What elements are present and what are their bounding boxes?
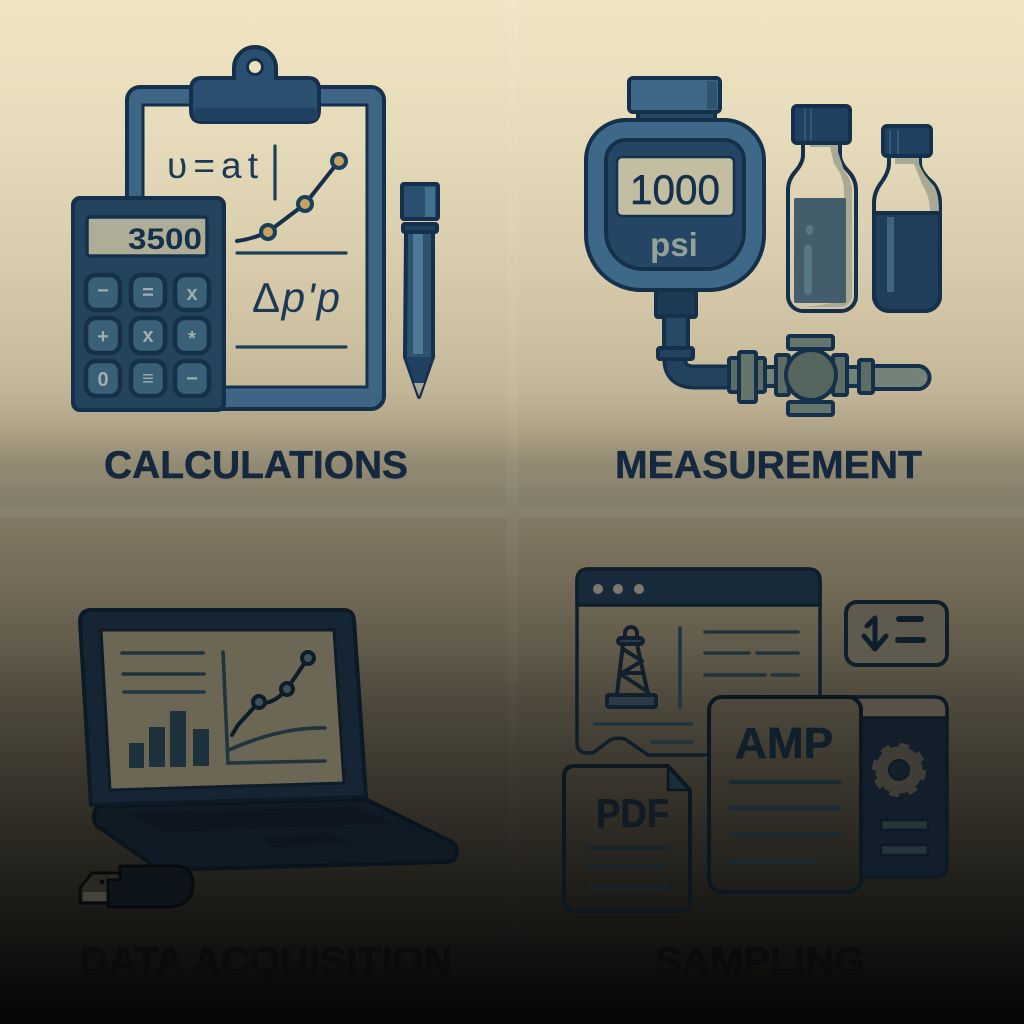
laptop lid	[80, 610, 366, 805]
icon: calculator: −	[97, 280, 109, 302]
heading: sampling: SAMPLING	[655, 940, 865, 983]
icon: sort badge	[846, 602, 947, 665]
icon: calculator: +	[97, 326, 109, 348]
panel: data acquisition	[80, 610, 457, 983]
laptop screen	[101, 630, 344, 790]
icon: calculator: x	[186, 283, 198, 305]
icon: browser window	[577, 569, 820, 755]
gauge reading: 1000	[630, 166, 720, 213]
icon: pipe and valve	[658, 336, 930, 415]
icon: sample bottle right	[874, 126, 940, 311]
pdf label: PDF	[596, 792, 669, 836]
heading: calculations: CALCULATIONS	[104, 444, 408, 487]
line chart	[223, 652, 325, 763]
icon: calculator: =	[142, 282, 154, 304]
formula: velocity: υ=at	[167, 145, 259, 186]
panel: calculations	[73, 47, 438, 487]
icon: calculator: x	[142, 325, 154, 347]
icon: amp document	[709, 697, 861, 892]
panel: measurement	[586, 78, 940, 487]
laptop base	[94, 799, 457, 870]
icon: pdf document	[564, 766, 690, 911]
calculator display value: 3500	[128, 223, 202, 256]
icon: calculator	[73, 198, 224, 410]
icon: clipboard	[127, 47, 384, 409]
icon: pencil	[402, 184, 438, 397]
heading: data acquisition: DATA ACQUISITION	[80, 940, 452, 983]
amp label: AMP	[735, 719, 833, 768]
icon: oil derrick	[607, 627, 656, 707]
gauge unit: psi	[650, 226, 698, 263]
formula: pressure: Δp'p	[252, 274, 340, 321]
icon: sample bottle left	[788, 106, 856, 311]
icon: settings panel	[850, 697, 947, 877]
icon: laptop	[80, 610, 457, 870]
bar chart	[129, 711, 209, 768]
icon: calculator: ≡	[142, 368, 154, 390]
panel: sampling	[564, 569, 947, 983]
icon: pressure gauge	[586, 78, 764, 349]
heading: measurement: MEASUREMENT	[615, 444, 922, 487]
icon: calculator: *	[188, 328, 196, 350]
icon: usb drive	[80, 866, 193, 907]
small line chart	[237, 154, 346, 241]
icon: gear	[875, 746, 923, 794]
icon: calculator: −	[186, 368, 198, 390]
icon: calculator: 0	[97, 369, 109, 391]
